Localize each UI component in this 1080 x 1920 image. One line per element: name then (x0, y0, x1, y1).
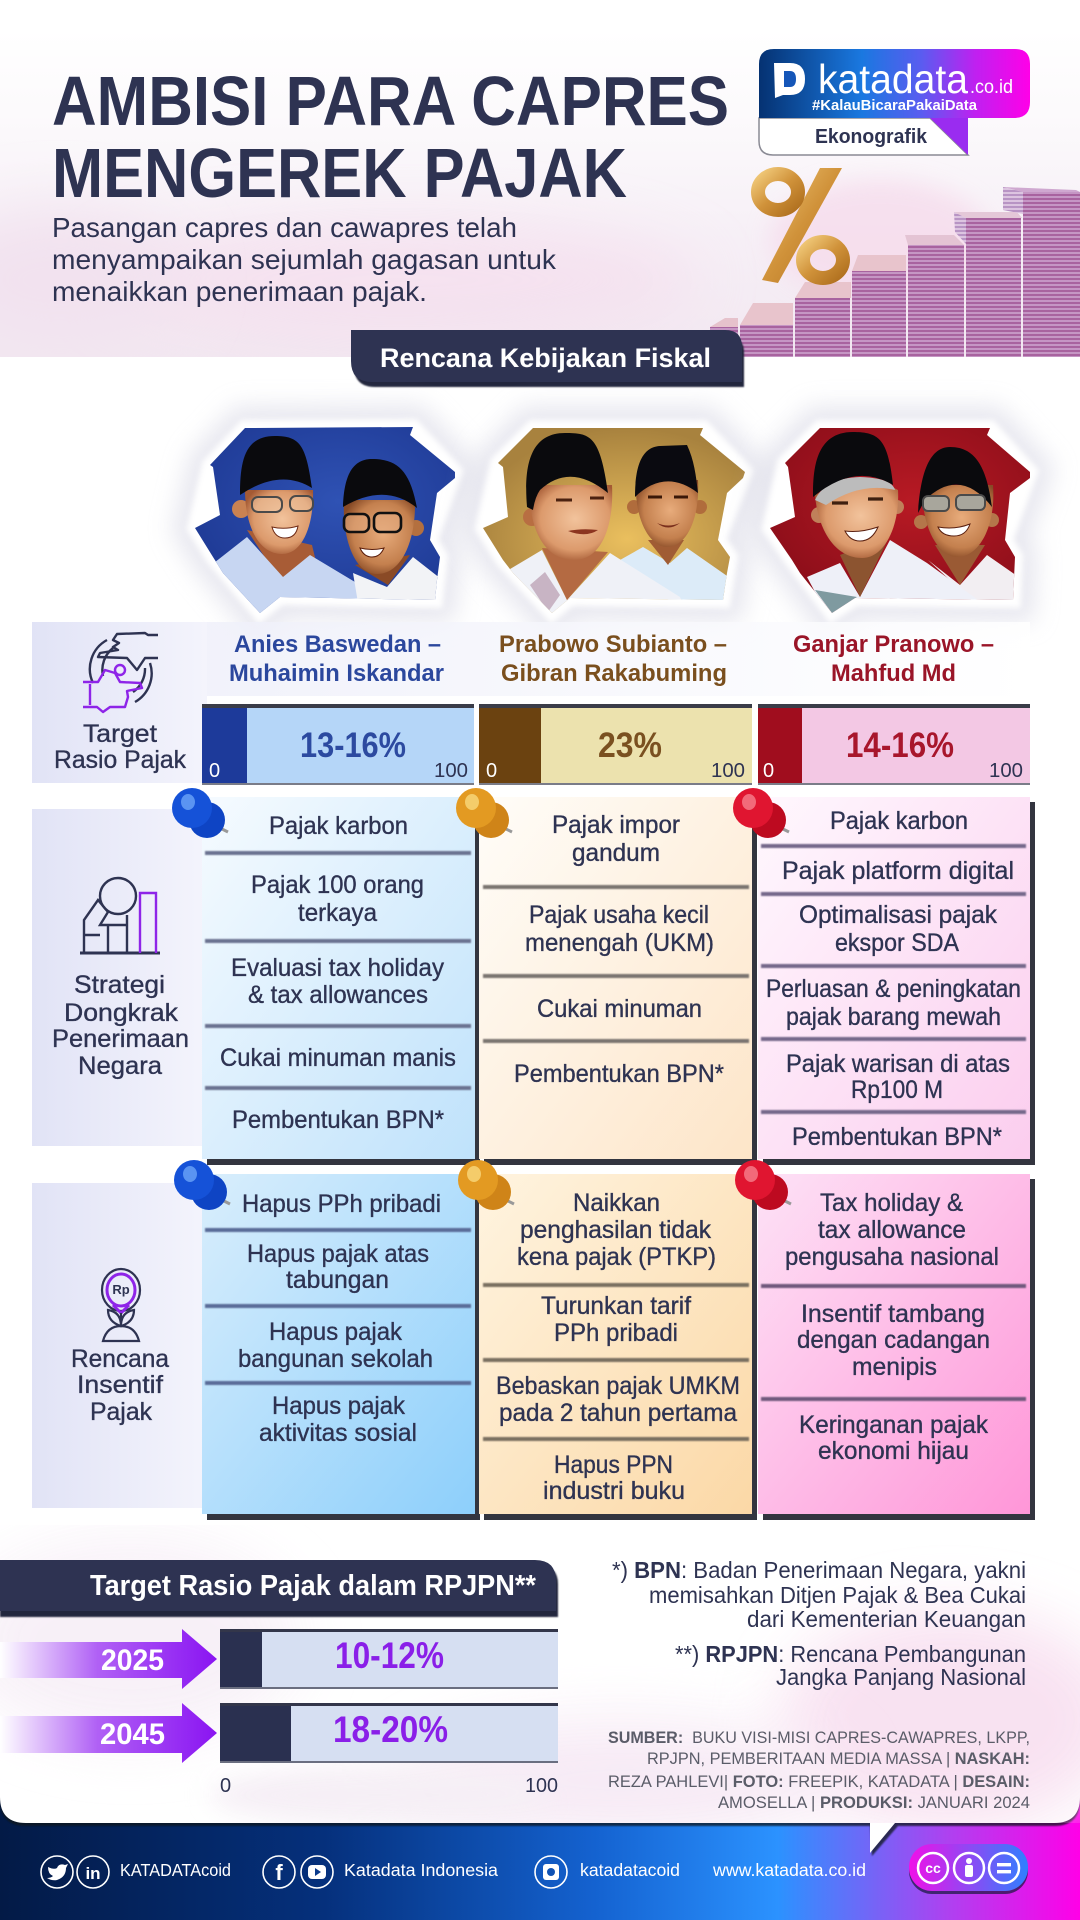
card: Prabowo strategy: Pajak usaha kecil (529, 901, 709, 929)
pin: red (735, 1160, 791, 1210)
title: MENGEREK PAJAK (52, 134, 627, 212)
notes: BPN and RPJPN definitions: dari Kementerian Keuangan (747, 1606, 1026, 1632)
card: Ganjar strategy: Optimalisasi pajak (799, 901, 997, 929)
card: Ganjar strategy: Rp100 M (851, 1076, 943, 1104)
card: Anies incentive: tabungan (286, 1266, 389, 1294)
icon: facebook: f (275, 1860, 283, 1885)
icon: twitter (41, 1856, 73, 1888)
card: Anies incentive: Hapus pajak (272, 1392, 405, 1420)
arrow: 2025 (0, 1629, 217, 1689)
Anies (247, 530, 316, 577)
card: Anies strategy: Pajak 100 orang (251, 871, 424, 899)
label: Strategi Dongkrak Penerimaan Negara: Dongkrak (64, 999, 179, 1027)
label: Rencana Insentif Pajak: Insentif (77, 1371, 163, 1399)
section heading: Rencana Kebijakan Fiskal: Rencana Kebijakan Fiskal (380, 343, 711, 373)
icon: linkedin (77, 1856, 109, 1888)
card: Prabowo strategy: Pajak impor (552, 811, 680, 839)
card: Ganjar incentive: pengusaha nasional (785, 1243, 999, 1271)
footer band (0, 1780, 1080, 1920)
card: Prabowo incentive: kena pajak (PTKP) (517, 1243, 716, 1271)
card: Prabowo incentive: penghasilan tidak (520, 1216, 711, 1244)
axis labels (220, 1775, 558, 1797)
bar: 2045 18-20%: 18-20% (333, 1709, 448, 1750)
candidate names: Mahfud Md (831, 660, 956, 687)
portrait: Prabowo Subianto and Gibran Rakabuming (483, 428, 745, 625)
label: Strategi Dongkrak Penerimaan Negara: Negara (78, 1052, 162, 1080)
bar: 2045 18-20% (220, 1703, 558, 1763)
logo: katadata: .co.id (970, 77, 1013, 98)
panel: candidate portraits (195, 427, 1030, 625)
bar: Anies 13-16%: 100 (434, 760, 468, 782)
label: Rencana Insentif Pajak: Rencana (71, 1345, 169, 1373)
card: Anies strategy: Pembentukan BPN* (232, 1106, 444, 1134)
notes: BPN and RPJPN definitions: memisahkan Ditjen Pajak & Bea Cukai (649, 1582, 1026, 1608)
card: Prabowo incentive: pada 2 tahun pertama (499, 1399, 737, 1427)
card: Ganjar strategy: Perluasan & peningkatan (766, 975, 1021, 1003)
bar: 2025 10-12% (220, 1629, 558, 1689)
bar: Ganjar 14-16%: 100 (989, 760, 1023, 782)
background page with speech tail (0, 1500, 1080, 1856)
creative commons badge (909, 1844, 1028, 1894)
portrait: Ganjar Pranowo and Mahfud Md (770, 428, 1030, 625)
panel: Rencana Insentif Pajak row (32, 1160, 1035, 1520)
card: Ganjar incentive: dengan cadangan (797, 1326, 990, 1354)
arrow: 2025: 2025 (101, 1644, 164, 1677)
candidate names: Ganjar Pranowo – (793, 631, 994, 658)
card: Prabowo incentive: industri buku (543, 1477, 685, 1505)
subtitle: menaikkan penerimaan pajak. (52, 276, 427, 307)
card: Prabowo incentive: PPh pribadi (554, 1319, 678, 1347)
card: Prabowo strategy: gandum (572, 839, 660, 867)
label: Target Rasio Pajak: Target (83, 720, 157, 748)
candidate names: Gibran Rakabuming (501, 660, 727, 687)
axis labels: 0 (220, 1775, 231, 1797)
bar: Anies 13-16%: 0 (209, 760, 220, 782)
pin: blue (174, 1160, 230, 1210)
pin: orange (458, 1160, 514, 1210)
arrow: 2045: 2045 (100, 1718, 165, 1751)
bar: 2025 10-12%: 10-12% (335, 1635, 444, 1676)
section heading: Target Rasio Pajak dalam RPJPN (0, 1560, 558, 1617)
card: Anies incentive: bangunan sekolah (238, 1345, 433, 1373)
subtitle: menyampaikan sejumlah gagasan untuk (52, 244, 557, 275)
card: Anies strategy (202, 797, 480, 1165)
card: Ganjar incentive: tax allowance (818, 1216, 966, 1244)
section heading: Target Rasio Pajak dalam RPJPN: Target Rasio Pajak dalam RPJPN** (90, 1570, 537, 1602)
Ganjar (807, 540, 974, 613)
card: Anies strategy: Cukai minuman manis (220, 1044, 456, 1072)
notes: BPN and RPJPN definitions (612, 1557, 1026, 1690)
card: Prabowo strategy: Pembentukan BPN* (514, 1060, 724, 1088)
header background (0, 140, 1080, 357)
card: Ganjar strategy (758, 797, 1035, 1165)
source credits: RPJPN, PEMBERITAAN MEDIA MASSA | NASKAH: (647, 1750, 1030, 1768)
candidate names: Muhaimin Iskandar (229, 660, 444, 687)
card: Prabowo strategy (479, 797, 757, 1165)
Gibran (620, 547, 726, 600)
source credits: REZA PAHLEVI| FOTO: FREEPIK, KATADATA | DESAIN: (608, 1773, 1030, 1791)
label: Strategi Dongkrak Penerimaan Negara: Penerimaan (52, 1025, 189, 1053)
pin: orange (456, 788, 512, 838)
subtitle (52, 212, 557, 307)
logo: katadata: katadata (818, 56, 968, 102)
chart: RPJPN target bars (0, 1629, 558, 1797)
card: Ganjar strategy: ekspor SDA (835, 929, 959, 957)
candidate name strip background (207, 622, 1030, 696)
footer social links (41, 1844, 1028, 1894)
title (52, 62, 729, 212)
card: Prabowo incentive: Hapus PPN (554, 1451, 673, 1479)
card: Anies strategy: Pajak karbon (269, 812, 408, 840)
pin: red (733, 788, 789, 838)
card: Ganjar incentive: Keringanan pajak (799, 1411, 988, 1439)
icon: Rp flower: Rp (112, 1282, 130, 1297)
logo: katadata: Ekonografik (815, 126, 928, 148)
logo: katadata (759, 49, 1030, 155)
card: Prabowo incentive (479, 1174, 757, 1520)
label: Strategi Dongkrak Penerimaan Negara (52, 971, 189, 1080)
portrait: Anies Baswedan and Muhaimin Iskandar (195, 427, 455, 625)
candidate names: Anies Baswedan – (234, 631, 441, 658)
handle: Katadata Indonesia: Katadata Indonesia (344, 1860, 498, 1880)
card: Prabowo incentive: Naikkan (573, 1189, 660, 1217)
bar: Anies 13-16%: 13-16% (300, 726, 406, 765)
label: Strategi Dongkrak Penerimaan Negara: Strategi (74, 971, 165, 999)
card: Prabowo strategy: Cukai minuman (537, 995, 702, 1023)
bar: Prabowo 23%: 23% (598, 726, 662, 765)
card: Anies strategy: terkaya (298, 899, 377, 927)
panel: Strategi Dongkrak Penerimaan Negara row (32, 788, 1035, 1165)
icon: D mark (774, 63, 805, 98)
title: AMBISI PARA CAPRES (52, 62, 729, 140)
subtitle: Pasangan capres dan cawapres telah (52, 212, 517, 243)
card: Anies incentive: Hapus pajak atas (247, 1240, 429, 1268)
bar: Anies 13-16% (202, 704, 474, 785)
source credits: SUMBER: BUKU VISI-MISI CAPRES-CAWAPRES, LKPP, (608, 1729, 1030, 1747)
card: Anies strategy: Evaluasi tax holiday (231, 954, 444, 982)
handle: katadatacoid: katadatacoid (580, 1860, 680, 1880)
card: Ganjar incentive: Tax holiday & (820, 1189, 963, 1217)
bar: Ganjar 14-16%: 0 (763, 760, 774, 782)
card: Ganjar incentive: Insentif tambang (801, 1300, 985, 1328)
icon: person and bars (80, 878, 160, 953)
notes: BPN and RPJPN definitions: *) BPN: Badan Penerimaan Negara, yakni (612, 1557, 1026, 1583)
bar: Ganjar 14-16% (758, 704, 1030, 785)
card: Anies incentive (202, 1174, 480, 1520)
icon: youtube (301, 1856, 333, 1888)
icon: instagram (535, 1856, 567, 1888)
label: Target Rasio Pajak: Rasio Pajak (54, 746, 186, 774)
card: Anies incentive: Hapus PPh pribadi (242, 1190, 441, 1218)
card: Ganjar strategy: Pembentukan BPN* (792, 1123, 1002, 1151)
card: Anies incentive: aktivitas sosial (259, 1419, 417, 1447)
label background (32, 809, 207, 1146)
Mahfud (928, 555, 1014, 600)
card: Ganjar strategy: pajak barang mewah (786, 1003, 1001, 1031)
label background (32, 1183, 207, 1508)
creative commons badge: cc (925, 1860, 941, 1876)
card: Prabowo incentive: Turunkan tarif (541, 1292, 691, 1320)
bar: Ganjar 14-16%: 14-16% (846, 726, 954, 765)
panel: Target Rasio Pajak row (32, 622, 1030, 785)
card: Ganjar incentive (758, 1174, 1035, 1520)
arrow: 2045 (0, 1703, 217, 1763)
card: Ganjar strategy: Pajak warisan di atas (786, 1050, 1010, 1078)
illustration: stacks of banknotes (710, 187, 1080, 357)
lower background banknote texture (0, 1540, 1080, 1840)
icon: hand and globe (83, 633, 158, 712)
label: Target Rasio Pajak (54, 720, 186, 774)
icon: gold percent sign (758, 168, 843, 283)
source credits (608, 1729, 1030, 1812)
label: Rencana Insentif Pajak (71, 1345, 169, 1426)
bar: Prabowo 23%: 100 (711, 760, 745, 782)
icon: Rp flower (102, 1269, 140, 1341)
card: Anies incentive: Hapus pajak (269, 1318, 402, 1346)
candidate names (229, 631, 994, 687)
Prabowo (510, 550, 681, 613)
source credits: AMOSELLA | PRODUKSI: JANUARI 2024 (718, 1794, 1030, 1812)
card: Ganjar strategy: Pajak platform digital (782, 857, 1014, 885)
handle: KATADATAcoid: KATADATAcoid (120, 1860, 231, 1880)
card: Ganjar incentive: ekonomi hijau (818, 1437, 969, 1465)
card: Ganjar incentive: menipis (852, 1353, 937, 1381)
notes: BPN and RPJPN definitions: Jangka Panjang Nasional (776, 1664, 1026, 1690)
icon: linkedin: in (85, 1864, 101, 1883)
bar: Prabowo 23% (479, 704, 752, 785)
bar: Prabowo 23%: 0 (486, 760, 497, 782)
label: Rencana Insentif Pajak: Pajak (90, 1398, 152, 1426)
axis labels: 100 (525, 1775, 558, 1797)
card: Ganjar strategy: Pajak karbon (830, 807, 968, 835)
section heading: Rencana Kebijakan Fiskal (351, 330, 744, 387)
website: www.katadata.co.id (712, 1860, 866, 1880)
candidate names: Prabowo Subianto – (499, 631, 727, 658)
pin: blue (172, 788, 228, 838)
logo: katadata: #KalauBicaraPakaiData (812, 97, 978, 114)
label background (32, 622, 207, 783)
card: Prabowo incentive: Bebaskan pajak UMKM (496, 1372, 740, 1400)
card: Prabowo strategy: menengah (UKM) (525, 929, 714, 957)
card: Anies strategy: & tax allowances (248, 981, 428, 1009)
notes: BPN and RPJPN definitions: **) RPJPN: Rencana Pembangunan (675, 1641, 1026, 1667)
Muhaimin (353, 557, 438, 600)
icon: facebook (263, 1856, 295, 1888)
